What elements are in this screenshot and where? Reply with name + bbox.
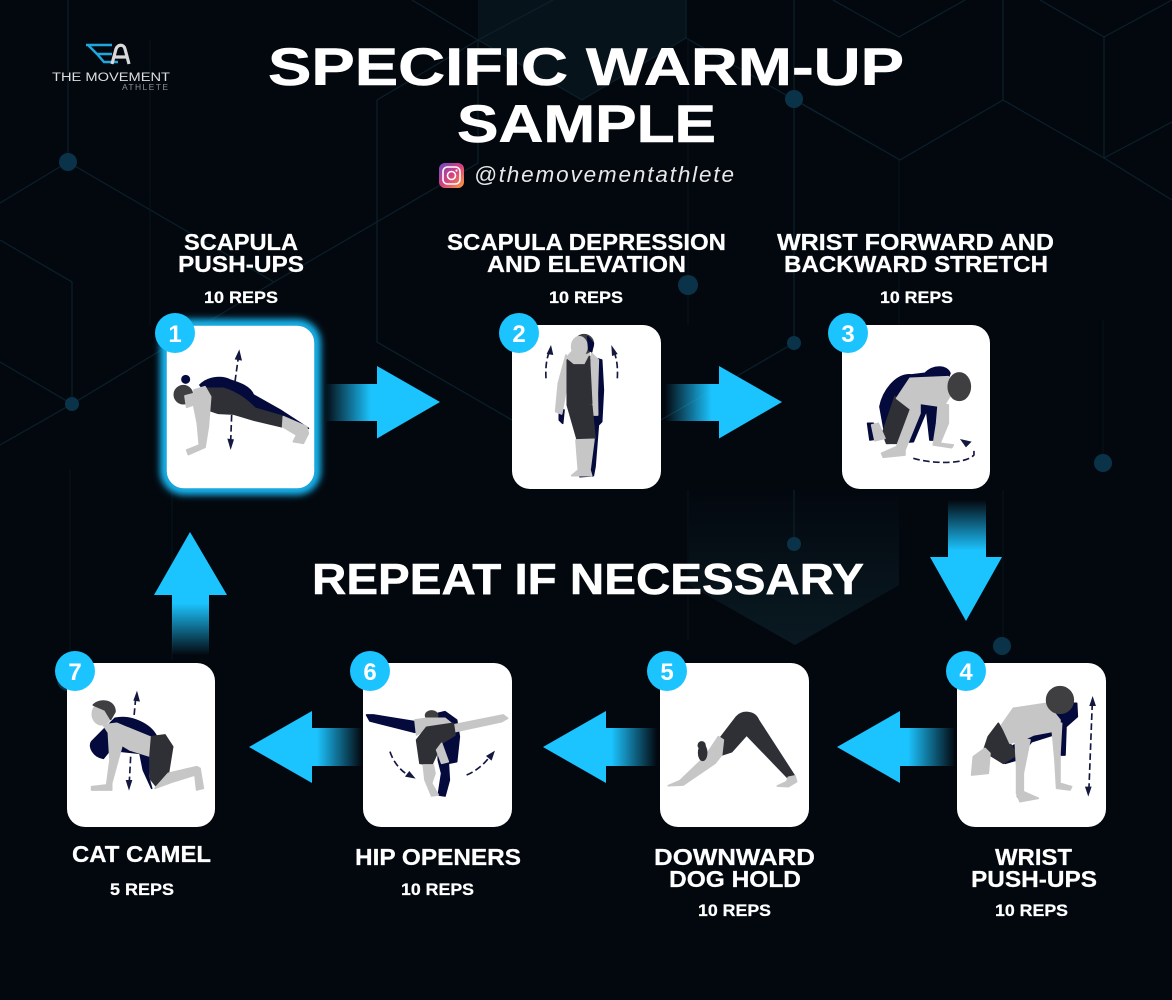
figure: hip opener — [367, 711, 508, 796]
label: 10 REPS — [549, 288, 623, 307]
title: SAMPLE — [457, 95, 716, 154]
badge 7 — [55, 651, 95, 691]
arrow: step 4 to 5 — [837, 711, 955, 783]
label — [971, 844, 1097, 920]
label — [355, 844, 521, 899]
label — [654, 844, 815, 920]
logo: The Movement Athlete — [52, 45, 170, 92]
title — [268, 38, 904, 154]
label: BACKWARD STRETCH — [784, 251, 1048, 277]
card — [842, 325, 990, 489]
label: WRIST — [995, 844, 1072, 870]
card — [957, 663, 1106, 827]
label: 10 REPS — [401, 880, 474, 899]
instagram handle: @themovementathlete — [474, 162, 734, 187]
badge 2: 2 — [512, 321, 526, 348]
label: 10 REPS — [995, 901, 1068, 920]
label — [178, 229, 304, 307]
card with glow — [160, 319, 321, 495]
label: SCAPULA — [184, 229, 298, 255]
figure: cat camel — [91, 691, 203, 791]
label: WRIST FORWARD AND — [777, 229, 1054, 255]
badge 1 — [155, 313, 195, 353]
badge 4: 4 — [959, 659, 973, 686]
label: 5 REPS — [110, 880, 174, 899]
card — [67, 663, 215, 827]
card — [660, 663, 809, 827]
label: 10 REPS — [698, 901, 771, 920]
step 7: cat camel — [55, 651, 215, 899]
arrow: step 2 to 3 — [665, 366, 782, 438]
logo: The Movement Athlete: ATHLETE — [122, 82, 168, 92]
arrow: step 5 to 6 — [543, 711, 657, 783]
badge 6 — [350, 651, 390, 691]
icon: instagram — [439, 163, 464, 188]
label: PUSH-UPS — [178, 251, 304, 277]
label — [72, 841, 211, 899]
label — [447, 229, 726, 307]
label — [777, 229, 1054, 307]
step 4: wrist push-ups — [946, 651, 1106, 920]
badge 1: 1 — [168, 321, 182, 348]
card — [363, 663, 512, 827]
label: 10 REPS — [204, 288, 278, 307]
label: HIP OPENERS — [355, 844, 521, 870]
label: PUSH-UPS — [971, 866, 1097, 892]
badge 2 — [499, 313, 539, 353]
step 3: wrist forward and backward stretch — [777, 229, 1054, 489]
step 6: hip openers — [350, 651, 521, 899]
step 1: scapula push-ups — [155, 229, 321, 495]
figure: kneeling wrist stretch — [868, 367, 974, 462]
card — [512, 325, 661, 489]
arrow: step 6 to 7 — [249, 711, 362, 783]
label: CAT CAMEL — [72, 841, 211, 867]
title: SPECIFIC WARM-UP — [268, 38, 904, 97]
badge 5: 5 — [660, 659, 674, 686]
badge 3: 3 — [841, 321, 855, 348]
icon: winged A — [86, 45, 129, 64]
heading: repeat if necessary: REPEAT IF NECESSARY — [312, 555, 864, 604]
badge 7: 7 — [68, 659, 82, 686]
label: DOWNWARD — [654, 844, 815, 870]
arrow: step 3 to 4 — [930, 500, 1002, 621]
badge 6: 6 — [363, 659, 377, 686]
step 2: scapula depression and elevation — [447, 229, 726, 489]
label: 10 REPS — [880, 288, 953, 307]
label: DOG HOLD — [669, 866, 801, 892]
label: AND ELEVATION — [487, 251, 686, 277]
logo: The Movement Athlete: THE MOVEMENT — [52, 72, 170, 84]
badge 5 — [647, 651, 687, 691]
figure: wrist push-up — [972, 687, 1096, 802]
arrow: step 7 to 1 — [154, 532, 227, 655]
arrow: step 1 to 2 — [325, 366, 440, 438]
step 5: downward dog hold — [647, 651, 815, 920]
figure: plank — [174, 349, 308, 455]
label: SCAPULA DEPRESSION — [447, 229, 726, 255]
badge 3 — [828, 313, 868, 353]
figure: standing — [546, 335, 618, 477]
figure: downward dog — [668, 713, 797, 787]
badge 4 — [946, 651, 986, 691]
